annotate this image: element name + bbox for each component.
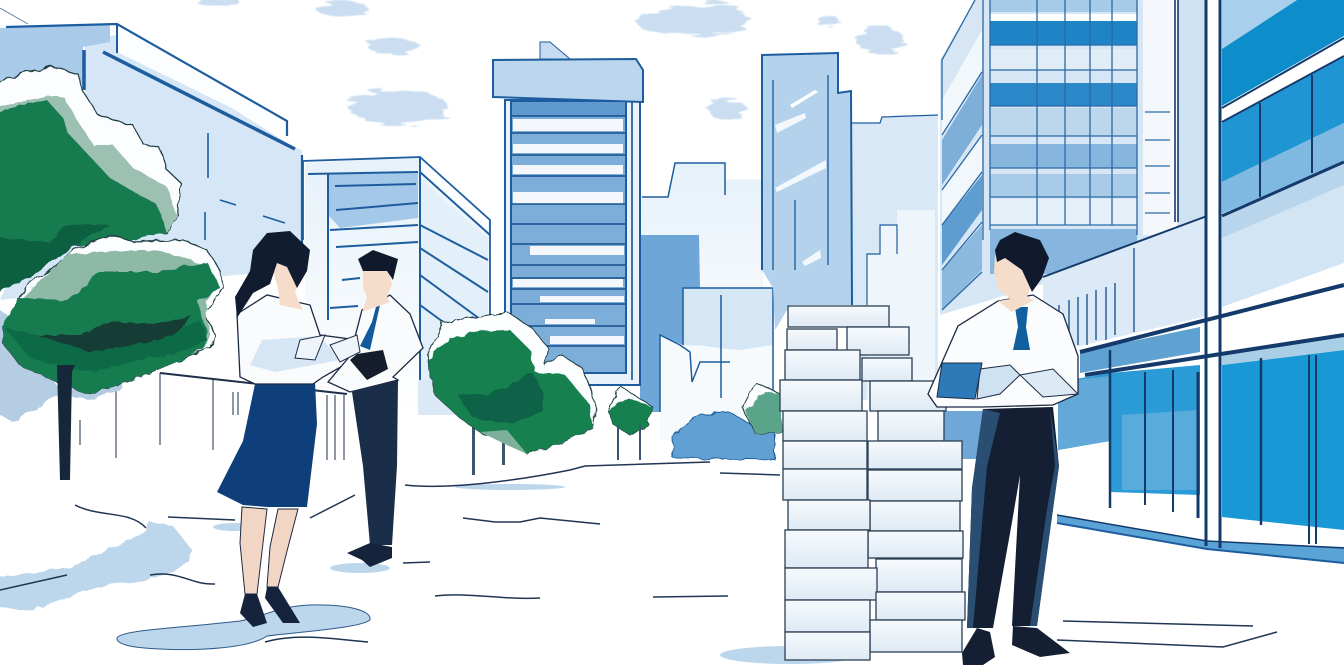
right foreground building: [943, 0, 1344, 563]
glass tower behind the stacks: [762, 53, 852, 330]
tree: lower left canopy: [3, 235, 223, 394]
trees: middle street: [427, 312, 782, 475]
clouds: [196, 0, 904, 124]
distant buildings: [640, 115, 938, 440]
person: man in white shirt and tie: [328, 250, 423, 567]
mid-left building: [303, 157, 490, 415]
right glass building: [940, 0, 1173, 315]
central tower: [493, 42, 643, 385]
tower window strips: [513, 119, 624, 344]
person: man with arms crossed and clipboard: [928, 232, 1078, 665]
ground sketch marks: [0, 462, 1277, 647]
tree: large left: [0, 66, 182, 298]
left fence: [80, 373, 347, 460]
tree trunk: [57, 340, 85, 480]
left building: [0, 8, 302, 300]
tree: blue foliage behind left tree: [0, 300, 123, 422]
paper stacks: [780, 306, 965, 660]
person: woman with papers: [217, 231, 353, 627]
ground puddles: [0, 484, 860, 664]
